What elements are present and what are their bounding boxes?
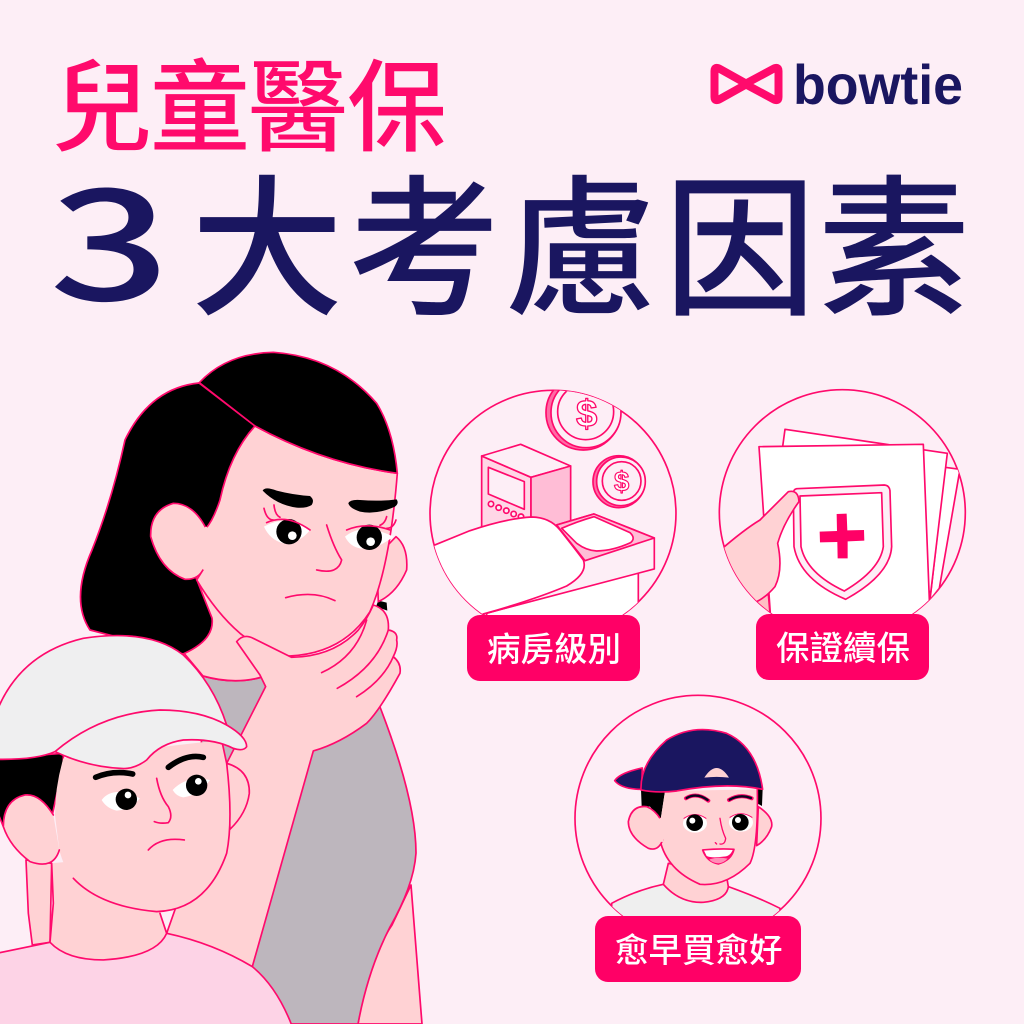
icon: policy papers [759, 429, 960, 633]
cheek [377, 537, 407, 602]
nose and mouth [286, 525, 342, 601]
right ear [757, 807, 772, 846]
boy nose and mouth [148, 778, 184, 850]
eyes [683, 814, 707, 833]
title: line two: 大考慮因素 [191, 127, 970, 347]
ear [151, 503, 206, 579]
logo: bowtie [714, 53, 963, 116]
icon: monitor [482, 444, 571, 533]
icon: small coin [593, 456, 645, 508]
boy face [55, 740, 230, 912]
icon: large coin: $ [576, 393, 597, 436]
boy eyebrows [96, 756, 203, 777]
label: guaranteed renewal: 保證續保 [776, 621, 910, 670]
mother grey top [200, 676, 416, 1024]
face shape [197, 426, 397, 656]
icon: cross [820, 514, 864, 558]
title: line one: 兒童醫保 [52, 27, 447, 172]
neck [663, 863, 728, 902]
boy right ear [227, 763, 249, 829]
panel: buy early [575, 695, 821, 943]
mother hair back [80, 383, 255, 654]
left ear [628, 807, 663, 849]
logo: bowtie: bowtie [793, 53, 963, 116]
eyebrows [263, 488, 398, 513]
icon: small coin: $ [614, 466, 629, 497]
hair [641, 789, 763, 819]
face [660, 789, 757, 885]
icon: bed [434, 513, 656, 615]
cap [615, 768, 642, 789]
panel: guaranteed renewal [717, 390, 965, 636]
title: line two: 3 [49, 127, 170, 344]
boy shirt [0, 933, 292, 1024]
mother lower arm [358, 885, 422, 1024]
mouth [703, 849, 734, 864]
icon: hand [724, 490, 800, 612]
boy left ear [3, 795, 59, 864]
shirt [610, 884, 781, 916]
panel: ward class [429, 390, 677, 615]
illustration: mother [80, 352, 422, 1024]
circle frame [575, 695, 821, 941]
icon: shield [793, 485, 892, 599]
boy neck [50, 853, 167, 960]
nose [715, 818, 726, 844]
boy hair [0, 753, 63, 827]
icon: large coin [545, 390, 622, 451]
mother neck [183, 585, 292, 681]
boy back arm [26, 860, 52, 945]
label: guaranteed renewal [756, 614, 929, 680]
mother hand and arm [167, 605, 400, 967]
circle frame [430, 390, 676, 636]
eyebrows [686, 795, 752, 801]
circle frame [719, 390, 965, 636]
eyes [264, 521, 393, 548]
boy eyes [102, 779, 210, 811]
label: buy early [595, 916, 801, 982]
label: ward class: 病房級別 [487, 622, 621, 671]
mother face [151, 352, 407, 656]
bangs [199, 352, 397, 473]
label: buy early: 愈早買愈好 [615, 923, 782, 972]
label: ward class [467, 615, 640, 681]
illustration: boy in white cap [0, 636, 292, 1024]
boy cap [0, 636, 247, 769]
